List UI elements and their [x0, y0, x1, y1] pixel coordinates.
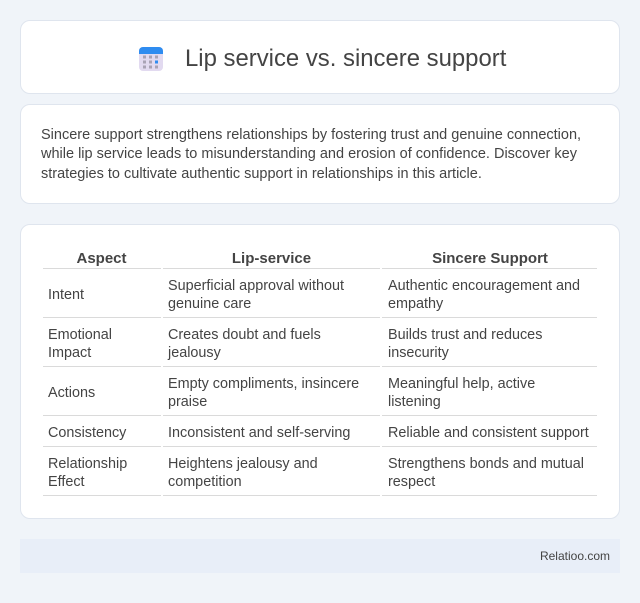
row: Relationship Effect: Relationship: [48, 456, 127, 472]
header: Sincere Support: Sincere Support: [432, 250, 548, 267]
row: Emotional Impact: Impact: [48, 345, 91, 361]
row: Intent: empathy: [388, 296, 443, 312]
row: Intent: Superficial approval without: [168, 278, 344, 294]
row: Intent: genuine care: [168, 296, 251, 312]
header: Lip-service: Lip-service: [232, 250, 311, 267]
intro text: [41, 126, 581, 182]
title: Lip service vs. sincere support: [185, 45, 506, 72]
row: Consistency: Inconsistent and self-serving: [168, 425, 350, 441]
row: Actions: [48, 376, 535, 410]
row: Emotional Impact: insecurity: [388, 345, 449, 361]
row: Relationship Effect: Effect: [48, 474, 85, 490]
row: Actions: listening: [388, 394, 441, 410]
panel: introduction: [20, 104, 620, 204]
row: Emotional Impact: Builds trust and reduces: [388, 327, 542, 343]
row: Consistency: Consistency: [48, 425, 126, 441]
row: Emotional Impact: jealousy: [168, 345, 221, 361]
row: Emotional Impact: Emotional: [48, 327, 112, 343]
panel: comparison table: [20, 224, 620, 519]
row: Relationship Effect: competition: [168, 474, 242, 490]
row: Consistency: Reliable and consistent support: [388, 425, 589, 441]
panel: title card: [20, 20, 620, 94]
row: Relationship Effect: [48, 456, 584, 490]
intro text: while lip service leads to misunderstanding and erosion of confidence. Discover key: [41, 146, 577, 162]
row: Emotional Impact: Creates doubt and fuels: [168, 327, 321, 343]
row: Actions: Meaningful help, active: [388, 376, 535, 392]
row: Intent: [48, 278, 580, 312]
icon: calendar: [139, 47, 163, 71]
row: Actions: praise: [168, 394, 207, 410]
footer bar: [20, 539, 620, 573]
intro text: Sincere support strengthens relationships by fostering trust and genuine connection,: [41, 126, 581, 142]
table header row: [76, 250, 548, 267]
row: Emotional Impact: [48, 327, 542, 361]
row: Actions: Empty compliments, insincere: [168, 376, 359, 392]
row: Actions: Actions: [48, 385, 95, 401]
row: Intent: Authentic encouragement and: [388, 278, 580, 294]
row: Relationship Effect: Heightens jealousy and: [168, 456, 318, 472]
header: Aspect: Aspect: [76, 250, 127, 267]
footer credit: Relatioo.com: [540, 549, 610, 563]
row: Intent: Intent: [48, 287, 84, 303]
intro text: strategies to cultivate authentic support in relationships in this article.: [41, 166, 482, 182]
row: Consistency: [48, 425, 589, 441]
row: Relationship Effect: respect: [388, 474, 435, 490]
row: Relationship Effect: Strengthens bonds and mutual: [388, 456, 584, 472]
